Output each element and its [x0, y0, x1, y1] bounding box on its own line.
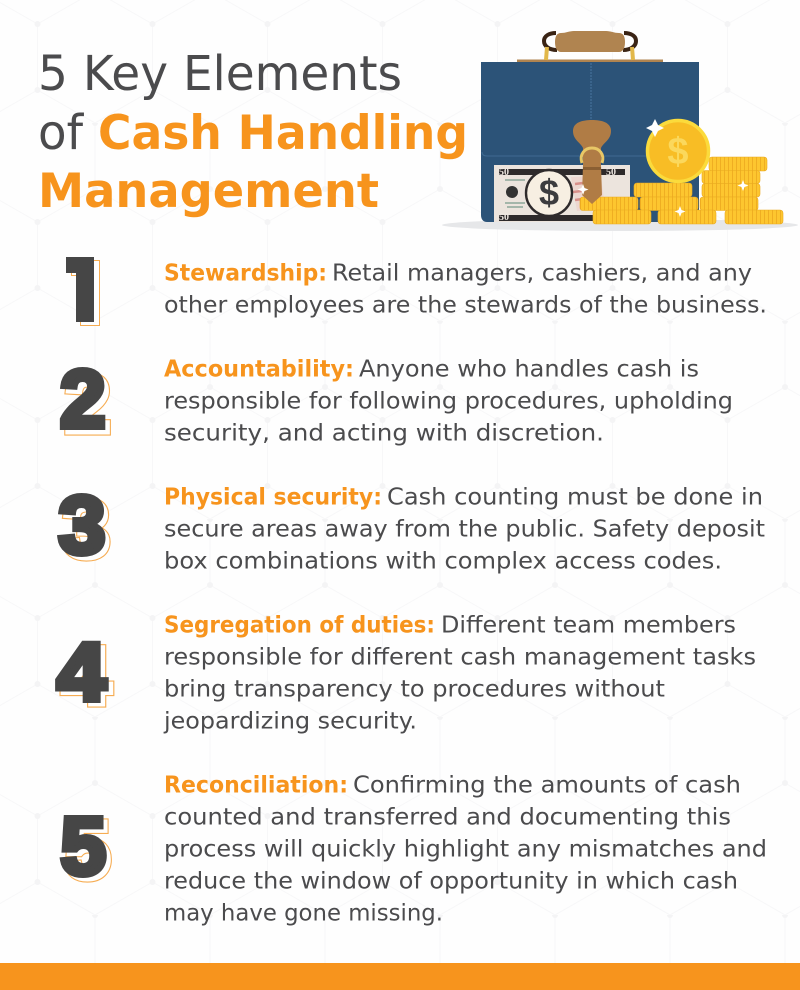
dollar bill: 50	[499, 212, 509, 223]
item 1: stewardship: Stewardship:	[164, 258, 327, 286]
item 1: stewardship	[164, 258, 767, 318]
item 2: accountability	[164, 354, 733, 446]
item 1: stewardship: other employees are the stewards of the business.	[164, 292, 767, 318]
numeral 2: 2	[60, 354, 106, 445]
numeral 4: 4	[62, 631, 111, 722]
numeral 3: 3	[63, 484, 110, 575]
large gold coin	[648, 120, 708, 182]
numeral 4: 4	[62, 631, 111, 722]
numeral 3: 3	[58, 480, 106, 571]
dollar bill: $	[539, 172, 559, 213]
item 4: segregation of duties: jeopardizing security.	[163, 708, 417, 734]
item 3: physical security: Cash counting must be done in	[387, 484, 763, 510]
item 2: accountability: security, and acting with discretion.	[164, 420, 604, 446]
numeral 2: 2	[65, 359, 111, 450]
item 5: reconciliation: reduce the window of opportunity in which cash	[164, 868, 738, 894]
numeral 1: 1	[62, 240, 118, 352]
item 3: physical security: Physical security:	[164, 482, 382, 510]
numeral 1	[66, 257, 100, 326]
item 4: segregation of duties: bring transparency to procedures without	[164, 676, 665, 702]
dollar bill: 50	[499, 167, 509, 178]
numeral 2: 2	[65, 359, 111, 450]
item 3: physical security	[164, 482, 765, 574]
numeral 1: 1	[57, 238, 113, 350]
item 5: reconciliation	[164, 770, 767, 926]
numeral 5: 5	[65, 805, 111, 896]
item 2: accountability: responsible for following procedures, upholding	[164, 388, 733, 414]
numeral 4: 4	[57, 627, 106, 718]
item 4: segregation of duties	[163, 610, 756, 734]
item 1: stewardship: Retail managers, cashiers, and any	[332, 260, 752, 286]
title: Management	[38, 164, 379, 219]
item 5: reconciliation: counted and transferred and documenting this	[164, 804, 731, 830]
title: 5 Key Elements	[38, 46, 402, 102]
buckle strap	[573, 120, 611, 204]
item 4: segregation of duties: responsible for different cash management tasks	[164, 644, 756, 670]
item 4: segregation of duties: Different team members	[441, 612, 736, 638]
item 2: accountability: Anyone who handles cash is	[359, 356, 699, 382]
item 5: reconciliation: Confirming the amounts of cash	[353, 772, 741, 798]
numeral 1: 1	[62, 240, 118, 352]
item 4: segregation of duties: Segregation of duties:	[164, 610, 435, 638]
footer bar	[0, 963, 800, 990]
item 5: reconciliation: may have gone missing.	[164, 900, 443, 926]
numeral 3: 3	[63, 484, 110, 575]
item 5: reconciliation: process will quickly highlight any mismatches and	[164, 836, 767, 862]
dollar bill	[494, 165, 630, 223]
title: Cash Handling	[98, 106, 468, 161]
item 3: physical security: box combinations with complex access codes.	[164, 548, 722, 574]
coin stacks	[580, 157, 783, 224]
icon: briefcase with money and coins	[442, 31, 798, 231]
title	[38, 46, 468, 219]
dollar bill: 50	[606, 167, 616, 178]
numeral 5: 5	[60, 801, 106, 892]
item 5: reconciliation: Reconciliation:	[164, 770, 348, 798]
title: of	[38, 105, 84, 161]
item 3: physical security: secure areas away from the public. Safety deposit	[164, 516, 765, 542]
item 2: accountability: Accountability:	[164, 354, 354, 382]
numeral 5: 5	[65, 805, 111, 896]
large gold coin: $	[667, 131, 689, 173]
